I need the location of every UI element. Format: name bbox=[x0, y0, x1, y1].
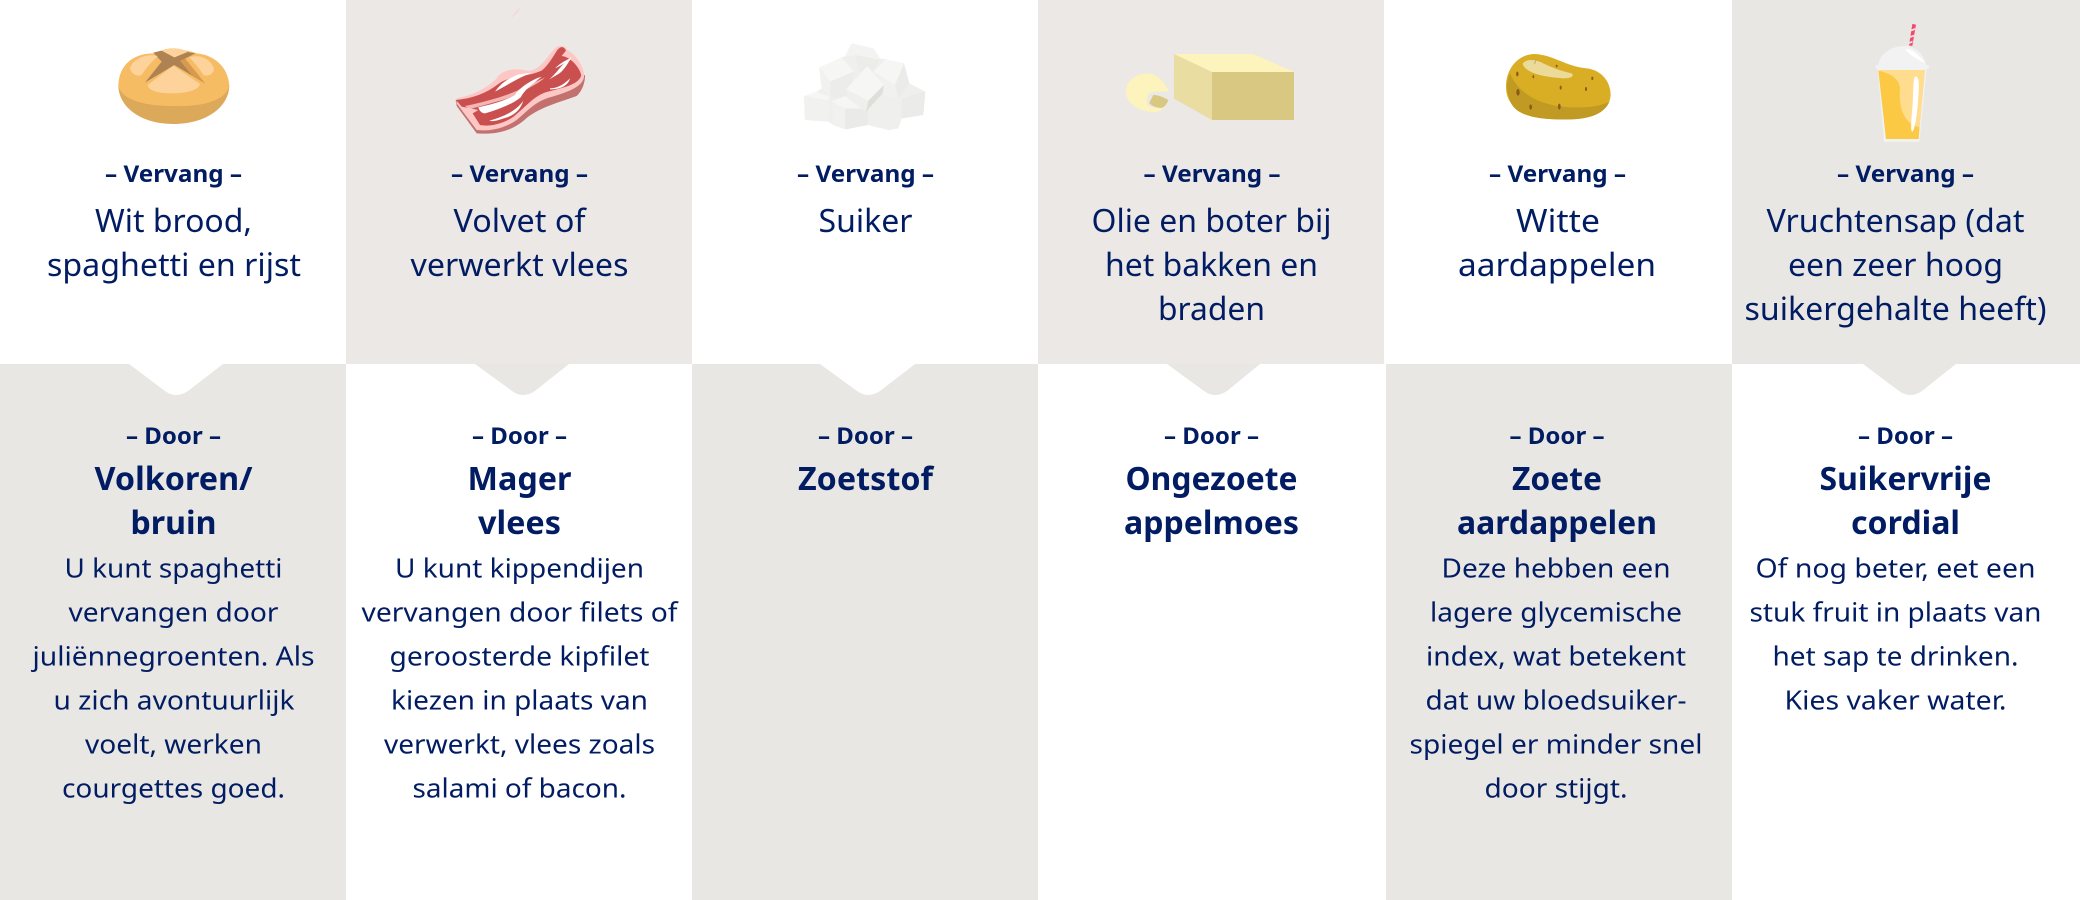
body text 5: Deze hebben een bbox=[1442, 550, 1670, 586]
body text 2: U kunt kippendijen bbox=[395, 550, 644, 586]
replacement heading: mager vlees: Mager bbox=[468, 457, 572, 500]
label: door 4: – Door – bbox=[1164, 419, 1259, 451]
body text 5: lagere glycemische bbox=[1430, 594, 1682, 630]
body text 5: dat uw bloedsuiker- bbox=[1426, 682, 1686, 718]
icon: potato bbox=[1506, 54, 1611, 119]
label: vervang 1: – Vervang – bbox=[105, 157, 242, 189]
body text 6 bbox=[1750, 550, 2042, 718]
item to replace: wit brood bbox=[47, 199, 301, 286]
replacement heading: mager vlees bbox=[468, 457, 572, 544]
body text 1: courgettes goed. bbox=[62, 770, 285, 806]
item to replace: olie en boter: het bakken en bbox=[1105, 243, 1318, 286]
body text 6: het sap te drinken. bbox=[1772, 638, 2018, 674]
item to replace: suiker: Suiker bbox=[818, 199, 912, 242]
item to replace: witte aardappelen: aardappelen bbox=[1458, 243, 1656, 286]
panel: column 5 potato bbox=[1386, 54, 1732, 900]
pointer: column 6 bbox=[1863, 364, 1956, 395]
replacement heading: ongezoete appelmoes bbox=[1124, 457, 1299, 544]
replacement heading: mager vlees: vlees bbox=[478, 501, 561, 544]
panel: column 1 bread bbox=[0, 48, 346, 900]
body text 2: geroosterde kipfilet bbox=[390, 638, 650, 674]
replacement heading: zoete aardappelen bbox=[1457, 457, 1657, 544]
body text 5: spiegel er minder snel bbox=[1410, 726, 1702, 762]
body text 1: juliënnegroenten. Als bbox=[30, 638, 315, 674]
icon: juice cup with straw bbox=[1876, 24, 1929, 142]
body text 5 bbox=[1410, 550, 1702, 806]
body text 6: stuk fruit in plaats van bbox=[1750, 594, 2042, 630]
item to replace: olie en boter: Olie en boter bij bbox=[1092, 199, 1332, 242]
item to replace: witte aardappelen: Witte bbox=[1516, 199, 1600, 242]
replacement heading: ongezoete appelmoes: Ongezoete bbox=[1126, 457, 1298, 500]
replacement heading: zoete aardappelen: aardappelen bbox=[1457, 501, 1657, 544]
body text 6: Of nog beter, eet een bbox=[1756, 550, 2036, 586]
label: door 6: – Door – bbox=[1858, 419, 1953, 451]
pointer: column 4 bbox=[1167, 364, 1260, 395]
body text 6: Kies vaker water. bbox=[1784, 682, 2006, 718]
item to replace: wit brood: spaghetti en rijst bbox=[47, 243, 301, 286]
icon: bread roll bbox=[118, 48, 229, 124]
body text 1: U kunt spaghetti bbox=[64, 550, 282, 586]
body text 2: kiezen in plaats van bbox=[391, 682, 648, 718]
body text 2: vervangen door filets of bbox=[362, 594, 679, 630]
item to replace: olie en boter: braden bbox=[1158, 287, 1265, 330]
icon: sugar cubes bbox=[804, 43, 925, 130]
replacement heading: volkoren bruin bbox=[94, 457, 253, 544]
panel: column 2 bacon bbox=[346, 0, 692, 806]
item to replace: vruchtensap: een zeer hoog bbox=[1788, 243, 2003, 286]
label: vervang 4: – Vervang – bbox=[1144, 157, 1280, 189]
label: door 3: – Door – bbox=[818, 419, 913, 451]
label: vervang 6: – Vervang – bbox=[1837, 157, 1974, 189]
replacement heading: volkoren bruin: bruin bbox=[130, 501, 216, 544]
panel: column 6 juice bbox=[1732, 0, 2080, 718]
body text 1: vervangen door bbox=[68, 594, 279, 630]
pointer: column 1 bbox=[129, 364, 223, 395]
replacement heading: zoete aardappelen: Zoete bbox=[1512, 457, 1602, 500]
body text 2: salami of bacon. bbox=[412, 770, 626, 806]
label: door 5: – Door – bbox=[1510, 419, 1604, 451]
label: vervang 5: – Vervang – bbox=[1489, 157, 1626, 189]
body text 1: voelt, werken bbox=[85, 726, 262, 762]
replacement heading: suikervrije cordial: Suikervrije bbox=[1820, 457, 1992, 500]
pointer: column 2 bbox=[475, 364, 569, 395]
label: door 2: – Door – bbox=[472, 419, 567, 451]
item to replace: volvet vlees: verwerkt vlees bbox=[410, 243, 628, 286]
label: vervang 2: – Vervang – bbox=[451, 157, 588, 189]
body text 1 bbox=[30, 550, 315, 806]
label: vervang 3: – Vervang – bbox=[797, 157, 934, 189]
item to replace: vruchtensap: Vruchtensap (dat bbox=[1766, 199, 2024, 242]
label: door 1: – Door – bbox=[126, 419, 221, 451]
body text 1: u zich avontuurlijk bbox=[54, 682, 294, 718]
replacement heading: suikervrije cordial: cordial bbox=[1851, 501, 1960, 544]
item to replace: vruchtensap: suikergehalte heeft) bbox=[1744, 287, 2046, 330]
item to replace: witte aardappelen bbox=[1458, 199, 1656, 286]
item to replace: vruchtensap bbox=[1744, 199, 2046, 330]
replacement heading: zoetstof: Zoetstof bbox=[798, 457, 935, 500]
body text 2: verwerkt, vlees zoals bbox=[384, 726, 655, 762]
body text 5: index, wat betekent bbox=[1426, 638, 1686, 674]
item to replace: volvet vlees bbox=[410, 199, 628, 286]
body text 5: door stijgt. bbox=[1484, 770, 1628, 806]
panel: column 4 butter bbox=[1038, 0, 1384, 544]
panel: column 3 sugar bbox=[692, 43, 1038, 900]
replacement heading: suikervrije cordial bbox=[1820, 457, 1992, 544]
item to replace: wit brood: Wit brood, bbox=[95, 199, 252, 242]
pointer: column 3 bbox=[820, 364, 915, 395]
item to replace: olie en boter bbox=[1092, 199, 1332, 330]
body text 2 bbox=[362, 550, 679, 806]
replacement heading: volkoren bruin: Volkoren/ bbox=[94, 457, 253, 500]
replacement heading: ongezoete appelmoes: appelmoes bbox=[1124, 501, 1299, 544]
icon: butter block and curl bbox=[1126, 54, 1294, 120]
item to replace: volvet vlees: Volvet of bbox=[454, 199, 587, 242]
icon: bacon bbox=[456, 7, 585, 134]
